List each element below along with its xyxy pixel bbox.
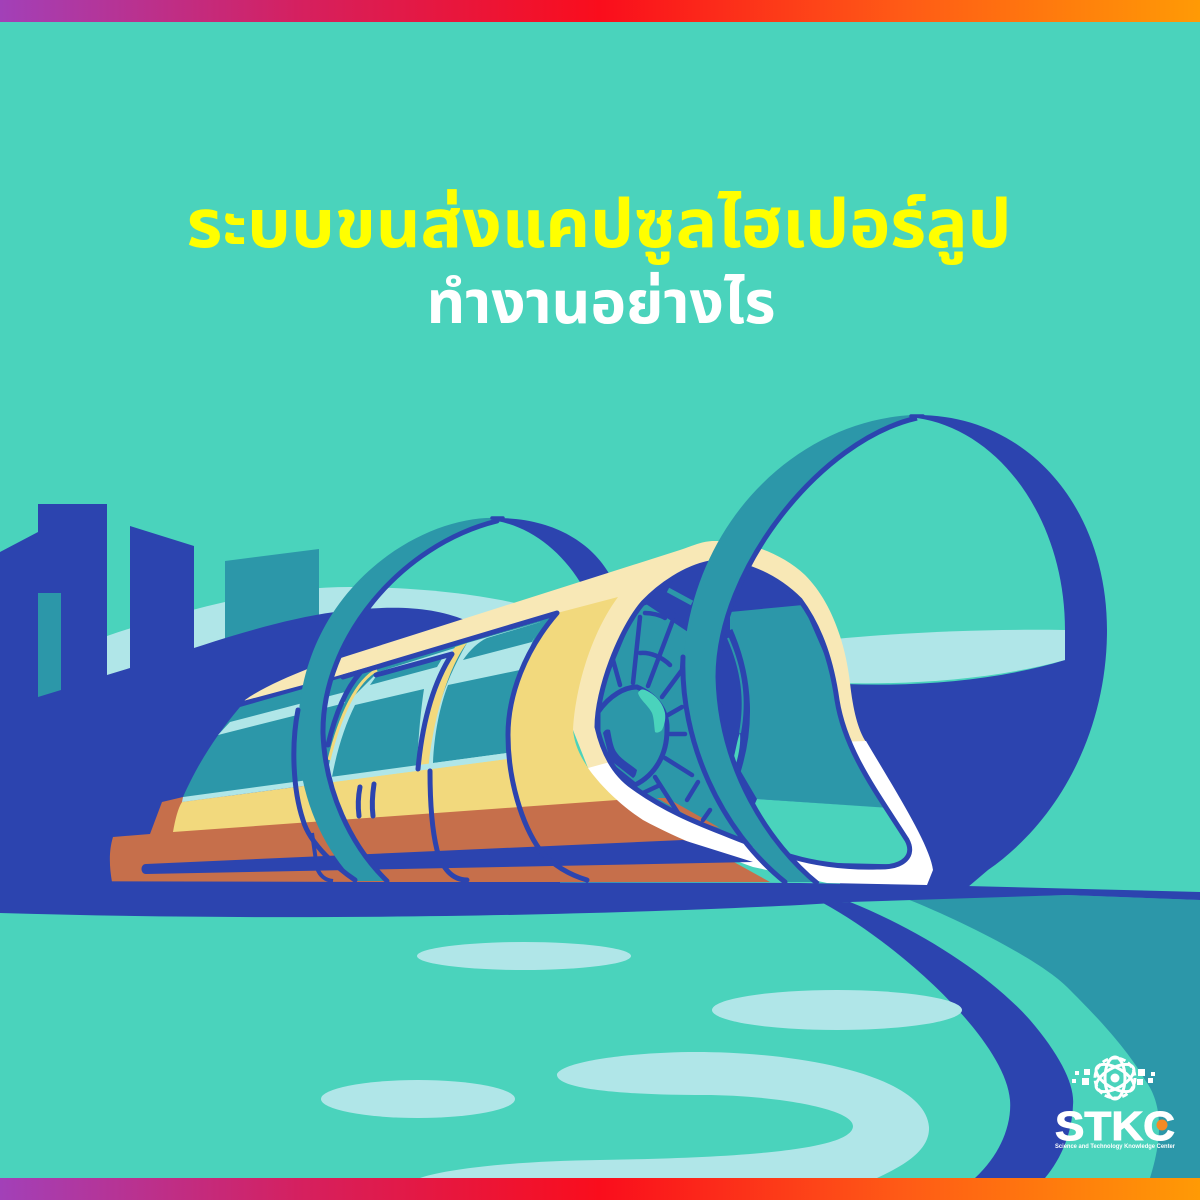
title line 2: ทำงานอย่างไร — [426, 269, 776, 336]
train navy window frame wedge — [240, 611, 557, 708]
right window light ground — [428, 622, 540, 772]
opening inner curved lines — [730, 630, 747, 775]
river swoosh — [420, 1052, 929, 1178]
small front ring — [294, 518, 503, 881]
right lower window — [433, 670, 520, 763]
orange sliver — [657, 798, 720, 828]
title line 1: ระบบขนส่งแคปซูลไฮเปอร์ลูป — [186, 186, 1011, 265]
ground — [0, 881, 1200, 917]
back lake — [835, 630, 1065, 683]
fan teal field — [602, 604, 747, 840]
bottom gradient bar — [0, 1178, 1200, 1200]
opening floor — [755, 799, 908, 864]
rail bar — [142, 840, 753, 874]
blue road — [823, 902, 1073, 1178]
puddle 3 — [321, 1080, 515, 1118]
white front lip — [588, 741, 933, 885]
skyline — [0, 504, 560, 900]
fan blades — [613, 613, 710, 820]
logo subtitle: Science and Technology Knowledge Center — [1055, 1144, 1176, 1150]
title — [186, 186, 1011, 336]
train cream shell — [243, 541, 866, 768]
hub dark crescent — [603, 729, 637, 778]
logo orange dot — [1156, 1120, 1168, 1130]
big back ring — [840, 415, 1107, 887]
door window light ground — [328, 648, 455, 785]
logo pixel dots — [1072, 1069, 1155, 1085]
right upper window — [463, 620, 547, 660]
back light-blue horizon band — [107, 587, 515, 700]
door lower window — [332, 689, 424, 777]
train yellow band — [173, 597, 618, 832]
train main window — [183, 616, 557, 797]
teal building — [225, 549, 319, 660]
train — [110, 541, 933, 885]
light stripe above band — [182, 753, 507, 802]
fan hub — [598, 687, 667, 785]
door lines — [328, 613, 587, 880]
skyline window — [38, 593, 61, 697]
opening interior panel — [730, 605, 885, 808]
hub highlight — [638, 689, 665, 733]
logo: STKC — [1055, 1057, 1176, 1150]
capsule opening — [590, 563, 925, 867]
door yellow trim — [420, 643, 467, 772]
big front ring — [683, 415, 923, 884]
puddle 2 — [712, 990, 962, 1030]
fan top dark wedge — [644, 604, 647, 606]
teal road — [907, 895, 1200, 1178]
small back ring — [497, 518, 610, 582]
left light stripe — [218, 692, 345, 735]
opening outline — [597, 563, 910, 867]
puddle 1 — [417, 942, 631, 970]
train orange base — [110, 790, 770, 882]
door upper window — [370, 657, 443, 685]
logo wordmark: STKC — [1055, 1103, 1175, 1149]
logo atom icon — [1092, 1057, 1138, 1099]
top gradient bar — [0, 0, 1200, 22]
